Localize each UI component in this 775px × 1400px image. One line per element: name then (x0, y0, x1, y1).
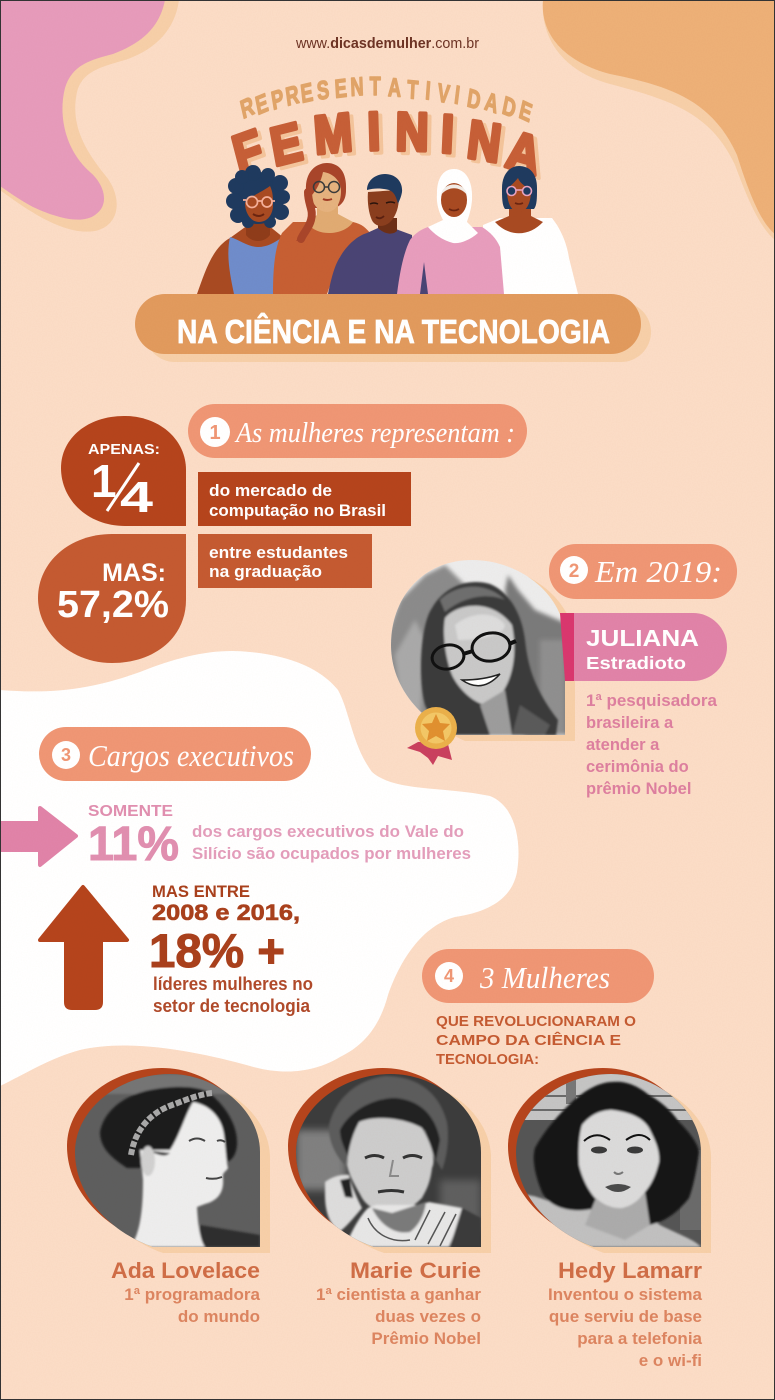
caption: Ada Lovelace: Ada Lovelace (111, 1258, 260, 1283)
section 2 heading: Em 2019: (594, 554, 722, 589)
stat: somente 11%: 11% (88, 818, 179, 871)
name banner: Juliana: Estradioto (586, 653, 686, 673)
woman in white top (483, 166, 578, 294)
woman with afro hair (197, 165, 290, 294)
stat: mas 57,2%: MAS: (102, 559, 166, 587)
caption: Hedy Lamarr: e o wi-fi (639, 1351, 702, 1370)
portrait: Hedy Lamarr (508, 1068, 711, 1253)
text box: entre estudantes: na graduação (209, 562, 322, 581)
caption: Marie Curie: Prêmio Nobel (371, 1329, 481, 1348)
text: lideres mulheres (153, 974, 313, 1016)
arrow: red up (40, 887, 127, 1008)
text box: entre estudantes (198, 534, 372, 588)
source url: www.dicasdemulher.com.br (295, 36, 479, 52)
text: Juliana description: brasileira a (586, 714, 674, 732)
stat: mas 57,2% (38, 534, 186, 663)
section 1 heading (188, 404, 527, 458)
caption: Ada Lovelace: do mundo (178, 1307, 260, 1326)
text: Juliana description: cerimônia do (586, 758, 689, 776)
text: Juliana description: atender a (586, 736, 660, 754)
text: Juliana description: 1ª pesquisadora (586, 692, 718, 710)
blob: top left pink (0, 0, 179, 232)
caption: Ada Lovelace (111, 1258, 261, 1326)
illustration: group of five women (197, 163, 578, 294)
caption: Ada Lovelace: 1ª programadora (124, 1285, 261, 1304)
name banner: Juliana (560, 613, 727, 681)
text: cargos executivos do Vale do Silicio: dos cargos executivos do Vale do (192, 822, 464, 841)
stat: 2008 e 2016 18%: 18% + (149, 924, 285, 977)
title: Feminina: FEMININA (231, 104, 550, 190)
title: Feminina: FEMININA (227, 101, 546, 187)
section 3 heading: Cargos executivos (88, 738, 294, 773)
blob: top right orange (543, 0, 775, 240)
caption: Hedy Lamarr: Inventou o sistema (548, 1285, 703, 1304)
stat: apenas 1/4: APENAS: (88, 441, 160, 458)
caption: Hedy Lamarr: Hedy Lamarr (558, 1258, 702, 1283)
stat: 2008 e 2016 18%: MAS ENTRE (152, 883, 250, 901)
subtitle banner: NA CIÊNCIA E NA TECNOLOGIA (177, 313, 610, 350)
icon: medal (407, 707, 457, 765)
caption: Marie Curie: Marie Curie (350, 1258, 481, 1283)
woman with braid (273, 163, 370, 294)
caption: Hedy Lamarr: para a telefonia (577, 1329, 703, 1348)
text: Juliana description: prêmio Nobel (586, 780, 691, 798)
name banner: Juliana: JULIANA (586, 625, 699, 651)
caption: Hedy Lamarr: que serviu de base (549, 1307, 702, 1326)
caption: Marie Curie: duas vezes o (375, 1307, 481, 1326)
text: cargos executivos do Vale do Silicio: Silício são ocupados por mulheres (192, 844, 471, 863)
text: cargos executivos do Vale do Silicio (192, 822, 471, 863)
stat: 2008 e 2016 18%: 2008 e 2016, (152, 900, 300, 925)
portrait: Juliana Estradioto (385, 555, 575, 741)
section 1 heading: 1 (209, 422, 221, 444)
section 4 heading (422, 949, 654, 1003)
woman with hijab (397, 169, 504, 294)
text: lideres mulheres: líderes mulheres no (153, 974, 313, 994)
stat: mas 57,2%: 57,2% (57, 584, 169, 626)
text box: mercado de computacao: do mercado de (209, 481, 332, 500)
stat: apenas 1/4 (61, 416, 186, 526)
section 3 heading (39, 727, 311, 781)
portrait: Ada Lovelace (67, 1068, 270, 1253)
subtitle banner (135, 294, 651, 362)
section 4 heading: 4 (444, 966, 454, 986)
title: Representatividade: REPRESENTATIVIDADE (238, 72, 535, 128)
stat: apenas 1/4: 4 (120, 473, 154, 522)
portrait: Marie Curie (288, 1068, 491, 1253)
text box: mercado de computacao (198, 472, 411, 526)
stat: 2008 e 2016 18% (149, 883, 300, 977)
woman with short hair (328, 174, 414, 294)
text: que revolucionaram: QUE REVOLUCIONARAM O (436, 1014, 636, 1030)
text: que revolucionaram (436, 1014, 636, 1068)
section 2 heading (549, 544, 737, 599)
stat: apenas 1/4: 1 (91, 455, 117, 507)
text: que revolucionaram: CAMPO DA CIÊNCIA E (436, 1031, 621, 1049)
text: lideres mulheres: setor de tecnologia (153, 996, 311, 1016)
arrow: pink right (0, 808, 76, 865)
section 3 heading: 3 (61, 745, 71, 765)
caption: Marie Curie: 1ª cientista a ganhar (316, 1285, 481, 1304)
section 2 heading: 2 (569, 561, 579, 582)
blob: white background of section 3 (0, 651, 519, 1086)
text box: entre estudantes: entre estudantes (209, 543, 348, 562)
text box: mercado de computacao: computação no Brasil (209, 501, 386, 520)
stat: somente 11%: SOMENTE (88, 803, 173, 820)
caption: Marie Curie (316, 1258, 481, 1348)
section 4 heading: 3 Mulheres (479, 960, 610, 995)
text: que revolucionaram: TECNOLOGIA: (436, 1052, 539, 1068)
caption: Hedy Lamarr (548, 1258, 703, 1370)
section 1 heading: As mulheres representam : (234, 417, 515, 449)
text: Juliana description (586, 692, 718, 798)
